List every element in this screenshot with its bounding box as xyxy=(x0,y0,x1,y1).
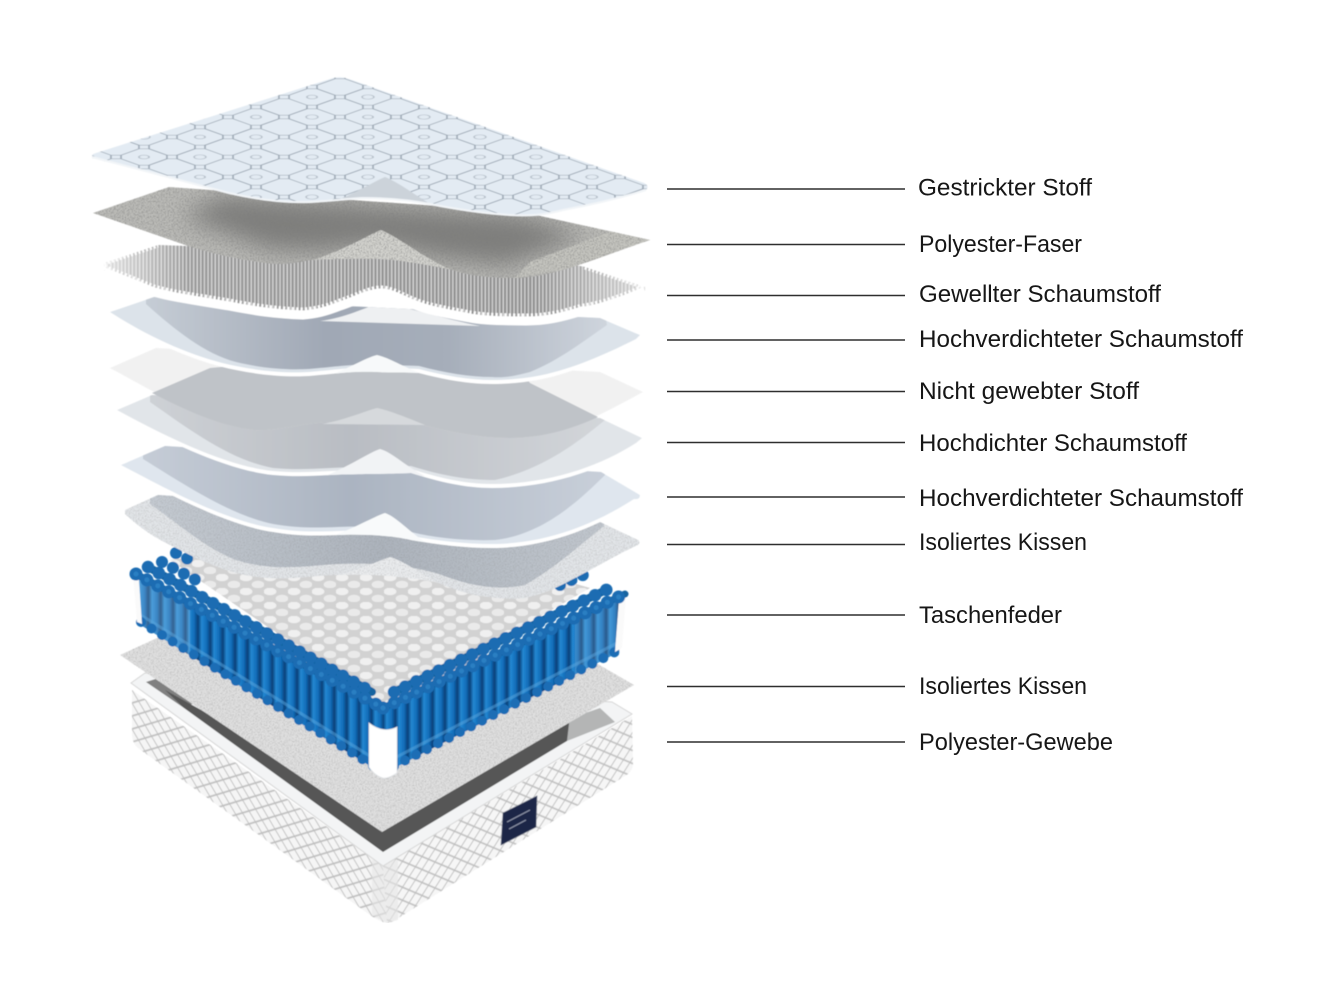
layer: high-density foam upper (Hochverdichteter Schaumstoff) xyxy=(110,296,640,384)
non-woven inner sheet xyxy=(152,360,598,438)
label: Isoliertes Kissen (lower): Isoliertes Kissen xyxy=(919,673,1087,700)
layer: corrugated foam (Gewellter Schaumstoff) xyxy=(106,244,646,326)
base side: left quilted face xyxy=(132,690,387,923)
label: Gestrickter Stoff: Gestrickter Stoff xyxy=(918,174,1092,202)
layer: high-density foam lower (Hochverdichteter Schaumstoff) xyxy=(122,446,640,549)
base cavity: back left corner xyxy=(146,676,200,708)
layer: knitted fabric (Gestrickter Stoff) xyxy=(88,72,653,222)
label: Isoliertes Kissen (upper): Isoliertes Kissen xyxy=(919,529,1087,556)
brand tag xyxy=(501,796,537,845)
spring right face xyxy=(383,594,625,774)
layer: high-density foam (Hochdichter Schaumstoff) xyxy=(118,394,642,488)
non-woven crease xyxy=(322,408,425,425)
corrugated foam left comb xyxy=(104,245,158,263)
label: Hochverdichteter Schaumstoff (upper): Hochverdichteter Schaumstoff xyxy=(919,326,1243,353)
base top rim xyxy=(131,673,632,866)
spring right fade xyxy=(575,594,625,675)
corrugated foam white base xyxy=(104,272,645,321)
corrugated foam teeth xyxy=(104,267,645,316)
label: Polyester-Faser: Polyester-Faser xyxy=(919,231,1082,258)
label: Hochdichter Schaumstoff: Hochdichter Schaumstoff xyxy=(919,430,1187,457)
layer: lower insulated pad (Isoliertes Kissen) xyxy=(115,630,640,835)
exploded mattress diagram xyxy=(88,72,655,923)
white corner guard left xyxy=(133,576,142,624)
layer: mattress base (Polyester-Gewebe) xyxy=(131,673,633,923)
label: Nicht gewebter Stoff: Nicht gewebter Stoff xyxy=(919,378,1139,405)
label: Gewellter Schaumstoff: Gewellter Schaumstoff xyxy=(919,281,1161,308)
white corner guard right xyxy=(615,596,626,652)
label: Polyester-Gewebe: Polyester-Gewebe xyxy=(919,729,1113,756)
corrugated foam right comb xyxy=(585,267,645,287)
knitted fabric sheet xyxy=(88,72,653,222)
layer: polyester fibre (Polyester-Faser) xyxy=(90,185,655,280)
spring front coil tops xyxy=(136,574,625,708)
base cavity: back right corner xyxy=(548,708,615,741)
white corner guard front xyxy=(369,723,397,778)
spring rear coil rows xyxy=(148,553,608,692)
layer: non-woven fabric (Nicht gewebter Stoff) xyxy=(110,348,643,438)
layer: upper insulated pad (Isoliertes Kissen) xyxy=(124,494,640,599)
base corner highlight xyxy=(372,860,398,923)
knitted fabric fold underside xyxy=(335,177,432,205)
base side: right quilted face xyxy=(383,716,633,923)
layer: pocket springs (Taschenfeder) xyxy=(133,530,626,778)
knitted fabric edge xyxy=(92,157,646,215)
spring left fade xyxy=(136,574,190,655)
spring left face xyxy=(136,574,383,774)
spring lower band xyxy=(139,614,619,764)
spring top face xyxy=(170,530,590,706)
label: Taschenfeder: Taschenfeder xyxy=(919,602,1062,629)
base cavity: dark fabric strip xyxy=(165,690,570,852)
non-woven outer translucent sheet xyxy=(110,348,643,438)
label: Hochverdichteter Schaumstoff (lower): Hochverdichteter Schaumstoff xyxy=(919,485,1243,512)
spring scalloped bottom xyxy=(141,622,617,772)
